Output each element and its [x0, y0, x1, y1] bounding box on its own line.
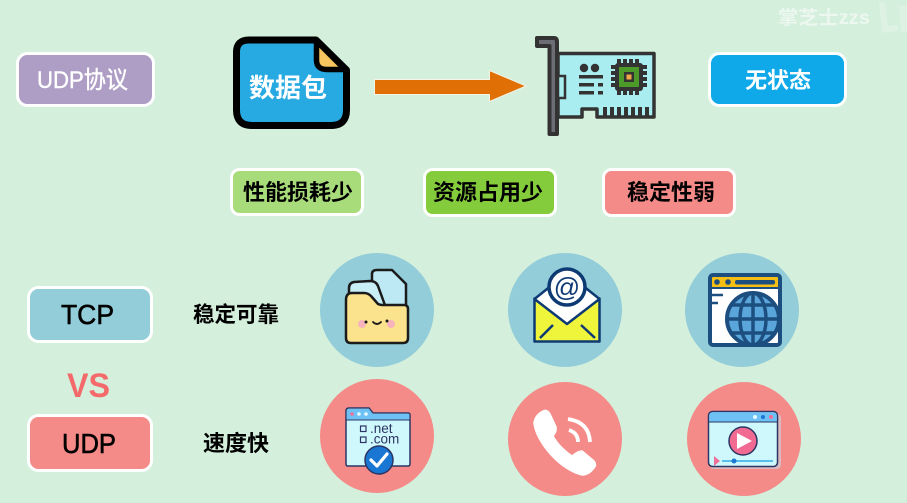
button: 无状态	[710, 54, 846, 106]
icon: email on blue circle: @	[554, 272, 580, 302]
icon: domain window on red circle: .net	[370, 421, 393, 436]
tag: 性能损耗少	[232, 170, 362, 214]
icon: email on blue circle	[508, 253, 622, 367]
icon: phone on red circle	[508, 382, 622, 496]
label: 稳定可靠: 稳定可靠	[193, 302, 279, 327]
icon: video player on red circle	[687, 382, 801, 496]
icon: data packet file: 数据包	[249, 73, 327, 103]
button: UDP: UDP	[62, 428, 116, 459]
icon: web globe on blue circle	[685, 253, 799, 367]
button: UDP协议: UDP协议	[37, 67, 128, 94]
button: TCP: TCP	[61, 299, 114, 330]
heading: VS: VS	[67, 367, 110, 405]
watermark	[778, 2, 907, 33]
icon: network card	[537, 38, 654, 134]
button: UDP协议	[18, 54, 154, 106]
button: 无状态: 无状态	[745, 68, 811, 93]
button: UDP	[28, 416, 152, 470]
label: 速度快: 速度快	[203, 431, 269, 456]
icon: domain window on red circle: .com	[370, 432, 399, 446]
tag: 稳定性弱	[604, 170, 734, 216]
tag: 资源占用少	[424, 170, 556, 216]
button: TCP	[28, 288, 152, 342]
icon: domain window on red circle	[320, 379, 434, 493]
icon: data packet file	[236, 40, 346, 126]
tag: 资源占用少: 资源占用少	[433, 180, 543, 205]
arrow: packet to network card	[374, 70, 526, 102]
tag: 性能损耗少: 性能损耗少	[243, 180, 353, 205]
tag: 稳定性弱: 稳定性弱	[627, 180, 715, 205]
watermark: 掌芝士zzs	[778, 6, 870, 29]
icon: folder on blue circle	[320, 253, 434, 367]
